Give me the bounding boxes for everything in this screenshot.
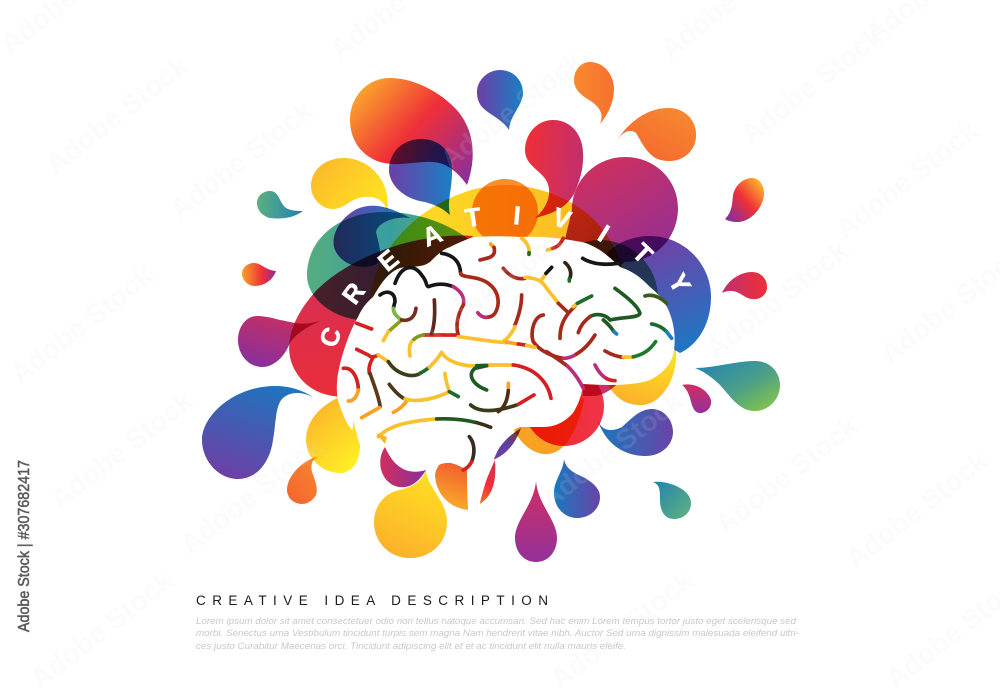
purple sliver beside brain stem — [493, 428, 521, 460]
faint watermarks: Adobe Stock — [45, 385, 199, 515]
large yellow arch behind brain — [370, 185, 630, 300]
blue purple drop top — [477, 70, 523, 130]
big red drop at left — [289, 236, 473, 397]
orange blob top right — [616, 108, 696, 161]
purple drop left — [238, 316, 320, 367]
magenta band under brain right — [583, 381, 620, 396]
green circle right — [542, 240, 658, 356]
orange crescent under temporal lobe — [510, 380, 584, 454]
big yellow drop bottom — [374, 470, 447, 558]
large orange-red-purple drop top — [350, 78, 473, 185]
faint watermarks: Adobe Stock — [840, 445, 994, 575]
description paragraph: ces justo Curabitur Maecenas orci. Tincidunt adipiscing elit et et ac tincidunt elit nulla mauris eleife. — [196, 640, 626, 651]
teal drop bottom right — [653, 482, 691, 519]
paint splash drops — [202, 62, 780, 562]
red circle under brain right — [524, 366, 604, 446]
faint watermarks: Adobe Stock — [545, 565, 699, 695]
description paragraph: morbi. Senectus urna Vestibulum tincidunt turpis sem magna Nam hendrerit vitae nibh. Auctor Sed urna dignissim malesuada eleifend ultri- — [196, 627, 799, 638]
orange drop lower left — [287, 456, 323, 504]
red drop top centre — [525, 120, 583, 218]
orange drop top — [574, 62, 614, 124]
heading: creative idea description: CREATIVE IDEA DESCRIPTION — [196, 593, 548, 608]
blue drop overlapping top drop — [389, 139, 452, 215]
purple drop inside green shape — [334, 206, 410, 267]
blue purple drop right — [597, 409, 673, 456]
yellow drop lower left — [306, 395, 360, 473]
yellow tip of lower sulcus — [376, 433, 387, 444]
big blue drop left — [202, 386, 313, 479]
yellow spike at frontal lobe — [352, 419, 358, 436]
small magenta drop right — [682, 384, 711, 413]
orange crescent below brain — [435, 455, 468, 510]
faint watermarks: Adobe Stock — [165, 95, 319, 225]
description paragraph: Lorem ipsum dolor sit amet consectetuer odio non tellus natoque accumsan. Sed hac enim Lorem tempus tortor justo eget scelerisque sed — [196, 615, 797, 626]
blue drop bottom — [554, 459, 600, 518]
yellow drop upper left — [311, 158, 388, 212]
small orange red drop right — [725, 178, 764, 222]
magenta crescent below brain — [380, 447, 426, 487]
small orange purple drop — [242, 263, 276, 286]
white brain silhouette — [337, 236, 675, 507]
stock id side label: Adobe Stock | #307682417 — [16, 460, 33, 632]
green drop behind the left of the arch — [307, 212, 470, 320]
faint watermarks: Adobe Stock — [40, 50, 194, 180]
faint watermarks: Adobe Stock — [415, 225, 569, 355]
faint watermarks: Adobe Stock — [25, 565, 179, 695]
small red drop right — [722, 272, 767, 299]
magenta drop bottom — [515, 481, 557, 562]
faint watermarks: Adobe Stock — [535, 385, 689, 515]
purple blue circle right — [600, 236, 711, 353]
faint watermarks: Adobe Stock — [175, 430, 329, 560]
faint watermarks: Adobe Stock — [700, 235, 854, 365]
brain sulci lines — [343, 238, 672, 470]
faint watermarks: Adobe Stock — [830, 115, 984, 245]
small green drop — [257, 191, 303, 218]
description paragraph — [196, 615, 799, 651]
red sliver beside brain stem — [478, 460, 495, 505]
curved title CREATIVITY: CREATIVITY — [313, 200, 697, 351]
faint watermarks: Adobe Stock — [5, 260, 159, 390]
yellow drop right — [608, 350, 676, 405]
faint watermarks: Adobe Stock — [710, 410, 864, 540]
teal green drop right — [695, 361, 780, 411]
faint watermarks: Adobe Stock — [735, 20, 889, 150]
orange circle — [472, 179, 538, 245]
faint watermarks: Adobe Stock — [435, 45, 589, 175]
magenta circle — [560, 157, 678, 280]
